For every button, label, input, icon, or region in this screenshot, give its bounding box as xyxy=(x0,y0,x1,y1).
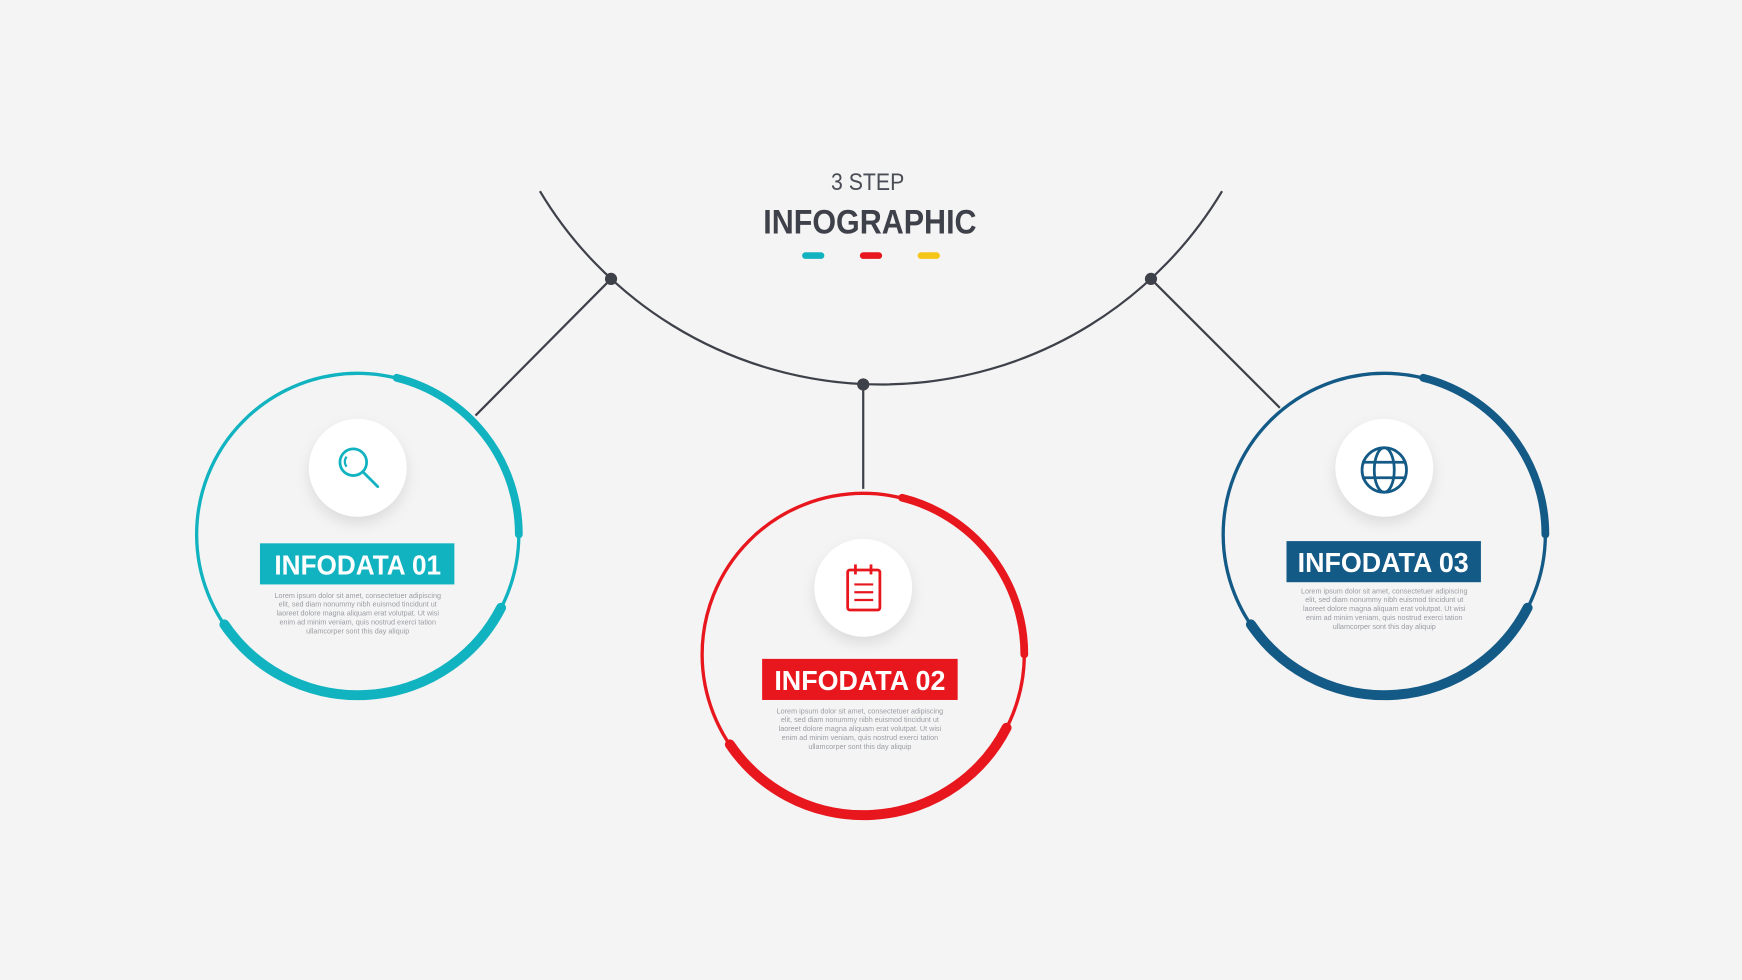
title: INFOGRAPHIC xyxy=(763,203,977,241)
text 03: enim ad minim veniam, quis nostrud exerci tation xyxy=(1306,613,1463,622)
step 1 xyxy=(197,373,519,696)
icon: magnifier xyxy=(309,419,407,517)
step 3 xyxy=(1223,373,1545,696)
text 02: Lorem ipsum dolor sit amet, consectetuer adipiscing xyxy=(777,706,943,715)
text 01: ullamcorper sont this day aliquip xyxy=(306,626,409,635)
text 03: laoreet dolore magna aliquam erat volutpat. Ut wisi xyxy=(1303,604,1466,613)
step 2 xyxy=(702,493,1024,816)
text 01: laoreet dolore magna aliquam erat volutpat. Ut wisi xyxy=(276,609,439,618)
text 01: elit, sed diam nonummy nibh euismod tincidunt ut xyxy=(279,600,437,609)
text 02: laoreet dolore magna aliquam erat volutpat. Ut wisi xyxy=(779,724,942,733)
text 03: elit, sed diam nonummy nibh euismod tincidunt ut xyxy=(1305,595,1463,604)
label 02: INFODATA 02 xyxy=(774,665,945,696)
label 03 xyxy=(1287,541,1481,582)
label 01 xyxy=(260,543,454,584)
text 02: ullamcorper sont this day aliquip xyxy=(808,742,911,751)
text 03: Lorem ipsum dolor sit amet, consectetuer adipiscing xyxy=(1301,586,1468,595)
label 03: INFODATA 03 xyxy=(1298,547,1469,578)
text 01: enim ad minim veniam, quis nostrud exerci tation xyxy=(279,617,436,626)
title xyxy=(763,169,977,259)
text 03 xyxy=(1301,586,1468,631)
icon: clipboard xyxy=(814,539,912,637)
connector arc xyxy=(475,191,1280,489)
text 02: elit, sed diam nonummy nibh euismod tincidunt ut xyxy=(781,715,939,724)
text 02 xyxy=(777,706,943,751)
label 01: INFODATA 01 xyxy=(274,549,441,580)
icon: globe xyxy=(1335,419,1433,517)
text 01 xyxy=(274,591,441,635)
title: 3 STEP xyxy=(831,169,904,196)
text 02: enim ad minim veniam, quis nostrud exerci tation xyxy=(782,733,938,742)
text 01: Lorem ipsum dolor sit amet, consectetuer adipiscing xyxy=(274,591,441,600)
text 03: ullamcorper sont this day aliquip xyxy=(1333,622,1436,631)
label 02 xyxy=(762,659,958,700)
